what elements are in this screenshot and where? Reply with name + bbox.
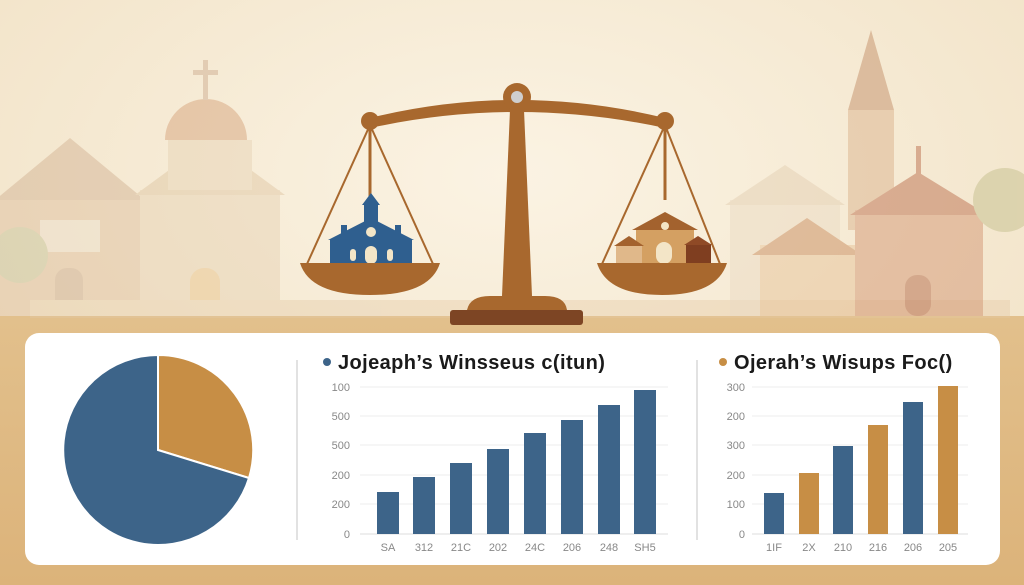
scale xyxy=(300,83,727,325)
chart 2: Ojerah’s Wisups Foc() xyxy=(734,352,953,374)
icon: brown churches xyxy=(614,212,712,264)
chart 1 xyxy=(323,352,668,554)
chart 1: 21C xyxy=(451,542,471,554)
chart 2: 200 xyxy=(727,470,745,482)
chart 2: 200 xyxy=(727,411,745,423)
chart 1: 0 xyxy=(344,529,350,541)
chart 1: 24C xyxy=(525,542,545,554)
chart 2: 100 xyxy=(727,499,745,511)
pie chart xyxy=(63,355,253,545)
chart 2: 300 xyxy=(727,440,745,452)
chart 1: Jojeaph’s Winsseus c(itun) xyxy=(338,352,605,374)
chart 1: 200 xyxy=(332,470,350,482)
chart 1: 500 xyxy=(332,411,350,423)
chart 2: 0 xyxy=(739,529,745,541)
chart 2: 206 xyxy=(904,542,922,554)
chart 1: 500 xyxy=(332,440,350,452)
chart 1: SA xyxy=(381,542,396,554)
icon: blue church xyxy=(328,193,414,264)
chart 2: 1IF xyxy=(766,542,782,554)
chart 1: 248 xyxy=(600,542,618,554)
chart 1: 100 xyxy=(332,382,350,394)
chart 1: 312 xyxy=(415,542,433,554)
chart 2: 205 xyxy=(939,542,957,554)
ground band xyxy=(0,316,1024,585)
chart 2: 210 xyxy=(834,542,852,554)
chart 1: 206 xyxy=(563,542,581,554)
background buildings right xyxy=(725,30,1024,316)
chart 1: 202 xyxy=(489,542,507,554)
chart 1: 200 xyxy=(332,499,350,511)
chart 2: 300 xyxy=(727,382,745,394)
chart 1: SH5 xyxy=(634,542,656,554)
chart 2: 2X xyxy=(802,542,816,554)
panel xyxy=(25,333,1000,565)
chart 2 xyxy=(719,352,968,554)
background buildings left xyxy=(0,60,1010,318)
chart 2: 216 xyxy=(869,542,887,554)
